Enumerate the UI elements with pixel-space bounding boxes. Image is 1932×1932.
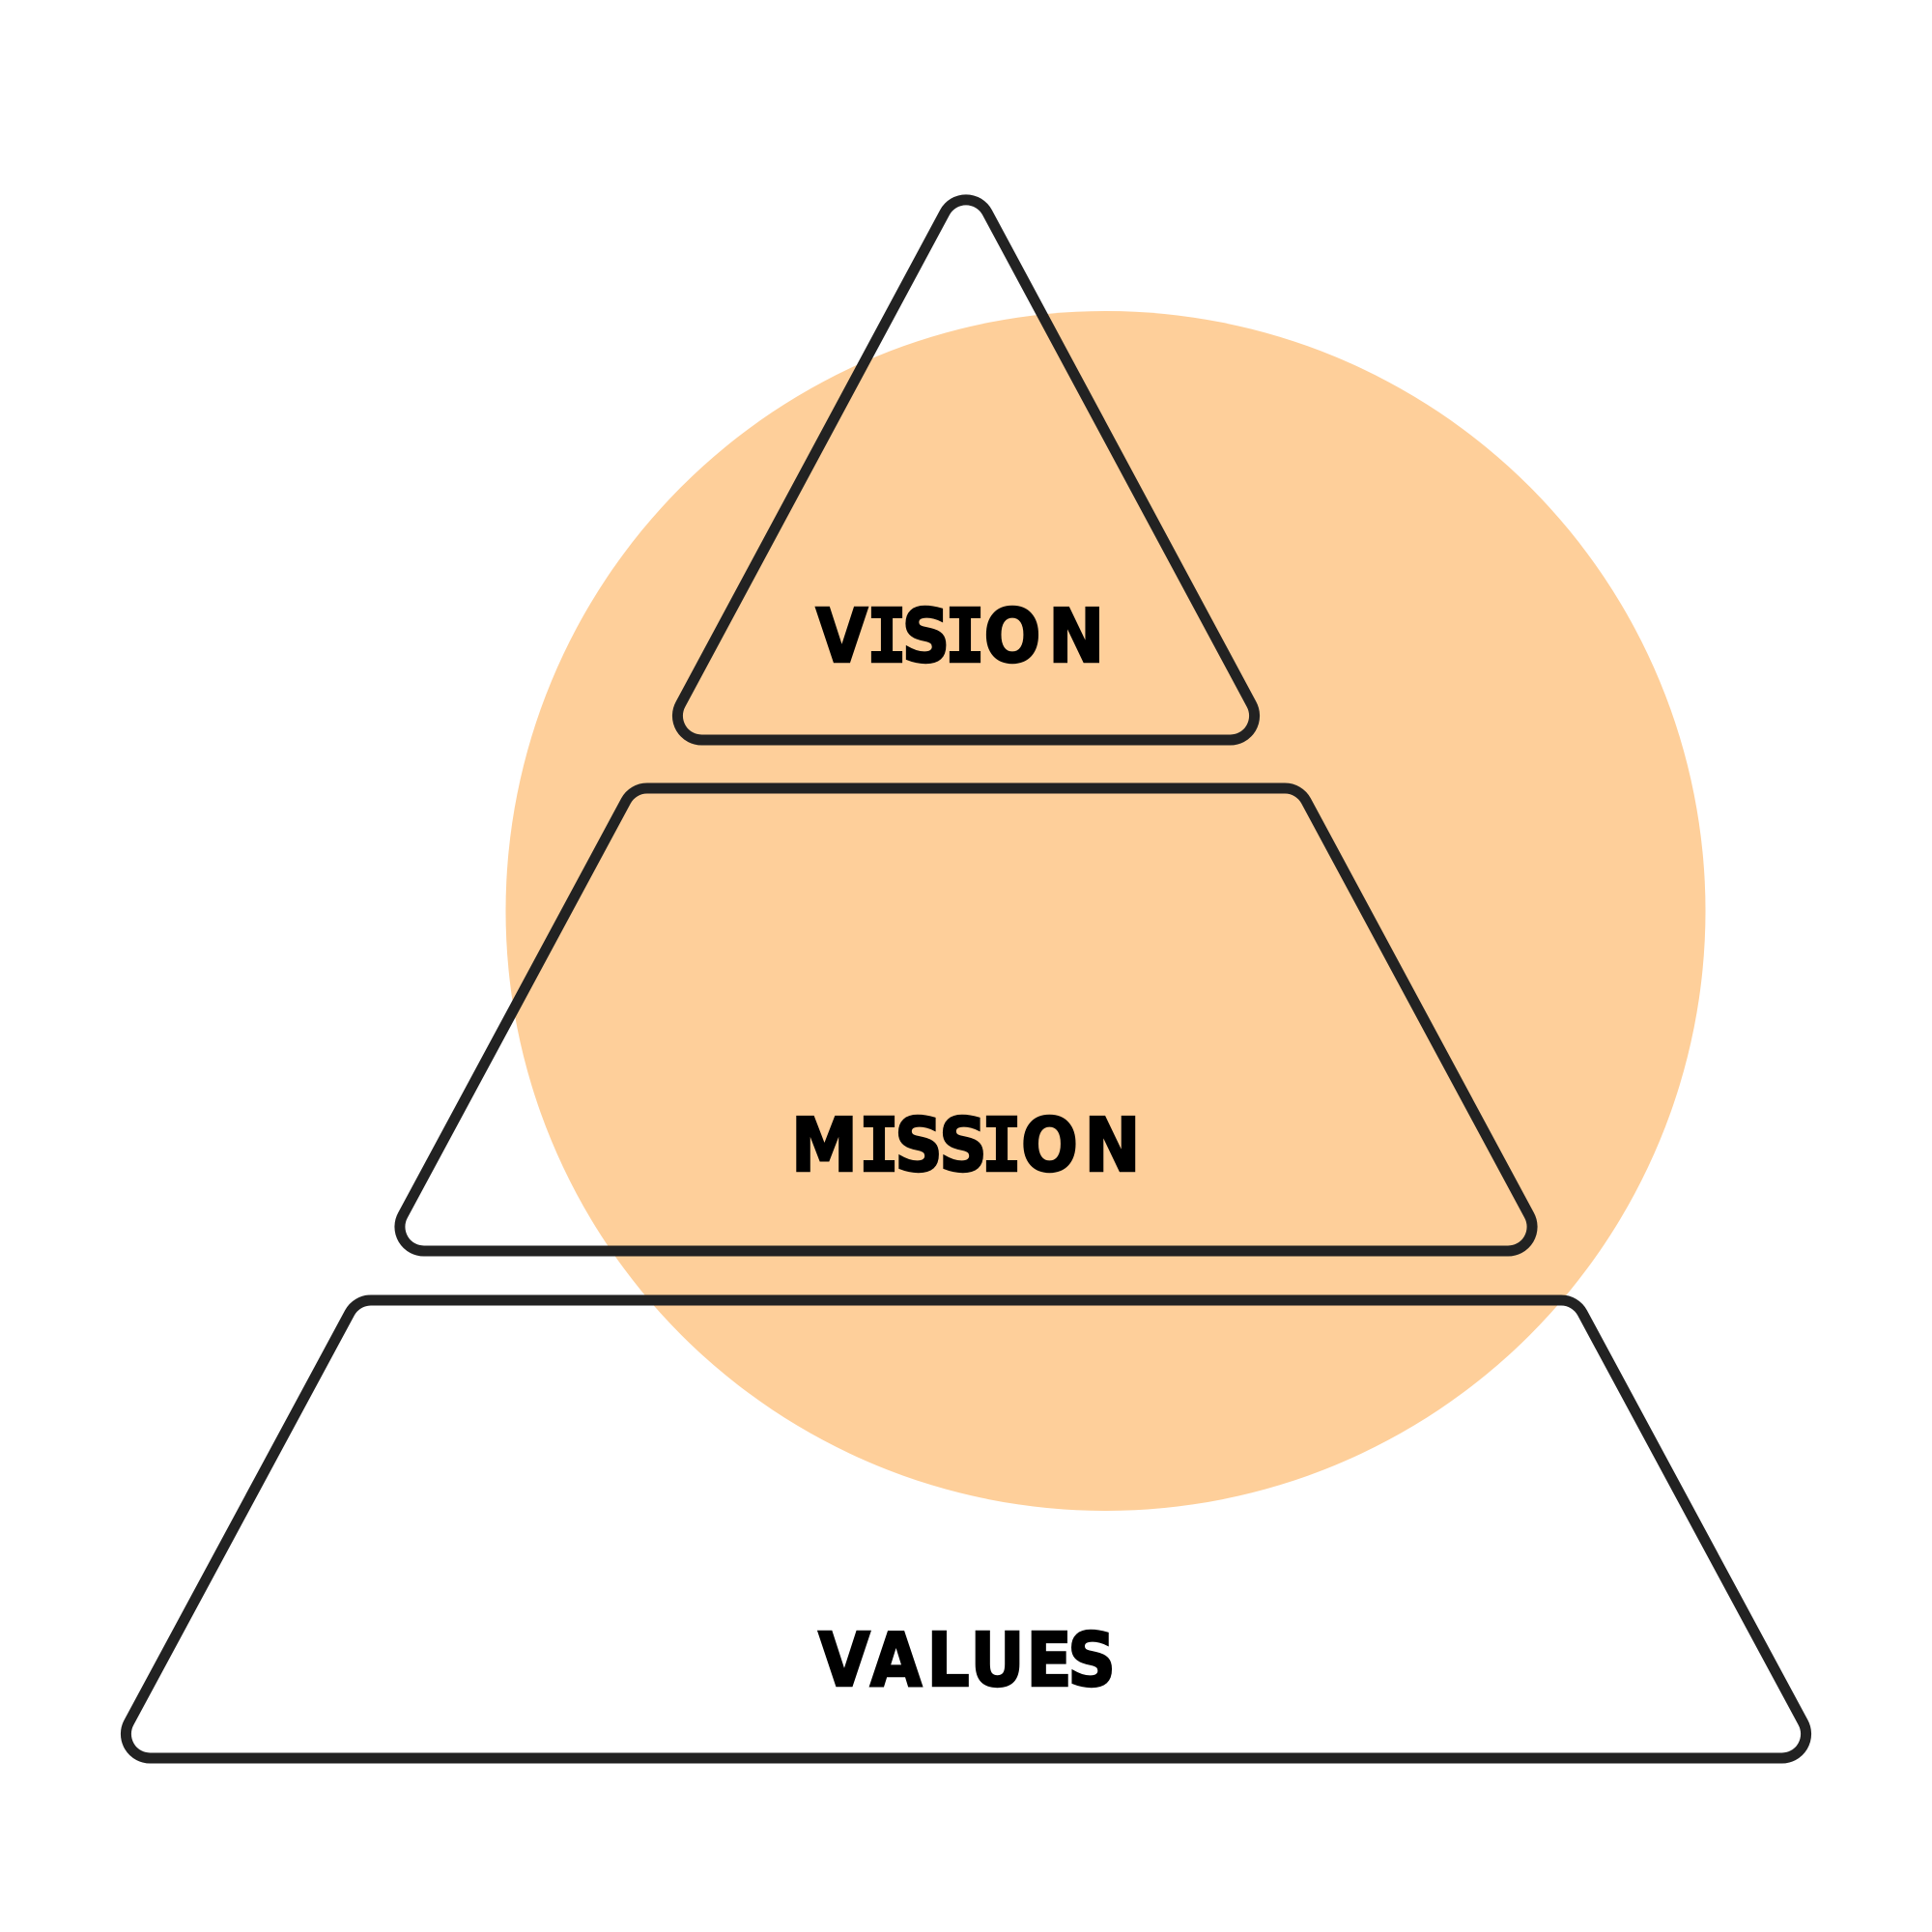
mission outline bbox=[400, 788, 1532, 1251]
pyramid tier: vision bbox=[677, 200, 1255, 740]
vision label: S bbox=[902, 594, 950, 680]
pyramid tier: values bbox=[126, 1300, 1806, 1758]
values label: U bbox=[970, 1618, 1025, 1704]
values outline bbox=[126, 1300, 1806, 1758]
vision label: N bbox=[1048, 594, 1104, 680]
values label: V bbox=[818, 1618, 870, 1704]
mission label: I bbox=[859, 1103, 899, 1189]
values label: S bbox=[1067, 1618, 1116, 1704]
mission label: M bbox=[791, 1103, 858, 1189]
vision label: V bbox=[816, 594, 868, 680]
vision outline bbox=[677, 200, 1255, 740]
values label: A bbox=[870, 1618, 923, 1704]
values label: L bbox=[926, 1618, 970, 1704]
pyramid tier: mission bbox=[400, 788, 1532, 1251]
mission label: I bbox=[981, 1103, 1022, 1189]
vision label: O bbox=[983, 594, 1040, 680]
values label: E bbox=[1026, 1618, 1072, 1704]
mission label: O bbox=[1021, 1103, 1078, 1189]
mission label: S bbox=[895, 1103, 943, 1189]
mission label: N bbox=[1084, 1103, 1140, 1189]
mission label: S bbox=[939, 1103, 987, 1189]
vision label: I bbox=[945, 594, 985, 680]
background orange circle bbox=[506, 311, 1706, 1511]
vision label: I bbox=[867, 594, 907, 680]
